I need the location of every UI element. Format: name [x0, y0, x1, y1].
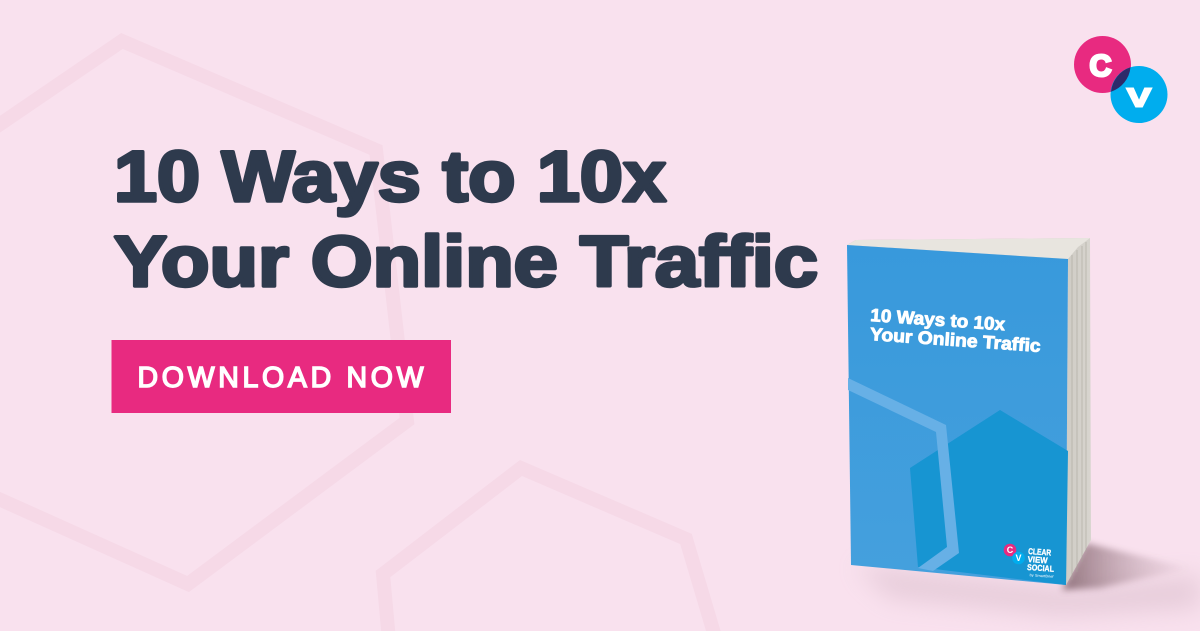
book shadow: [855, 543, 1200, 616]
logo: CV circles: C: [1090, 48, 1112, 83]
cover title: Your Online Traffic: [869, 324, 1041, 356]
cover logo: VIEW: [1027, 554, 1049, 565]
cover hexagon band: [848, 378, 959, 571]
cover logo: [1004, 544, 1055, 579]
logo: CV circles: V: [1127, 82, 1152, 112]
background hexagon outlines: [0, 41, 716, 631]
book mockup: [847, 238, 1200, 616]
button: download now: [112, 340, 451, 413]
title: [114, 138, 818, 302]
cover dark hexagon: [910, 410, 1068, 585]
cover logo: C: [1007, 545, 1014, 555]
cover logo: CLEAR: [1028, 546, 1052, 558]
cover logo: V: [1015, 553, 1022, 563]
button: download now: DOWNLOAD NOW: [138, 362, 424, 394]
book cover: [847, 245, 1068, 585]
cover title: 10 Ways to 10x: [870, 305, 1006, 334]
title: 10 Ways to 10x: [114, 138, 666, 217]
title: Your Online Traffic: [114, 223, 818, 302]
book pages: [847, 238, 1091, 585]
cover title: [868, 305, 1043, 356]
logo: CV circles: [1074, 36, 1168, 123]
cover logo: by SmartBrief: [1029, 573, 1054, 579]
cover logo: SOCIAL: [1027, 562, 1054, 574]
